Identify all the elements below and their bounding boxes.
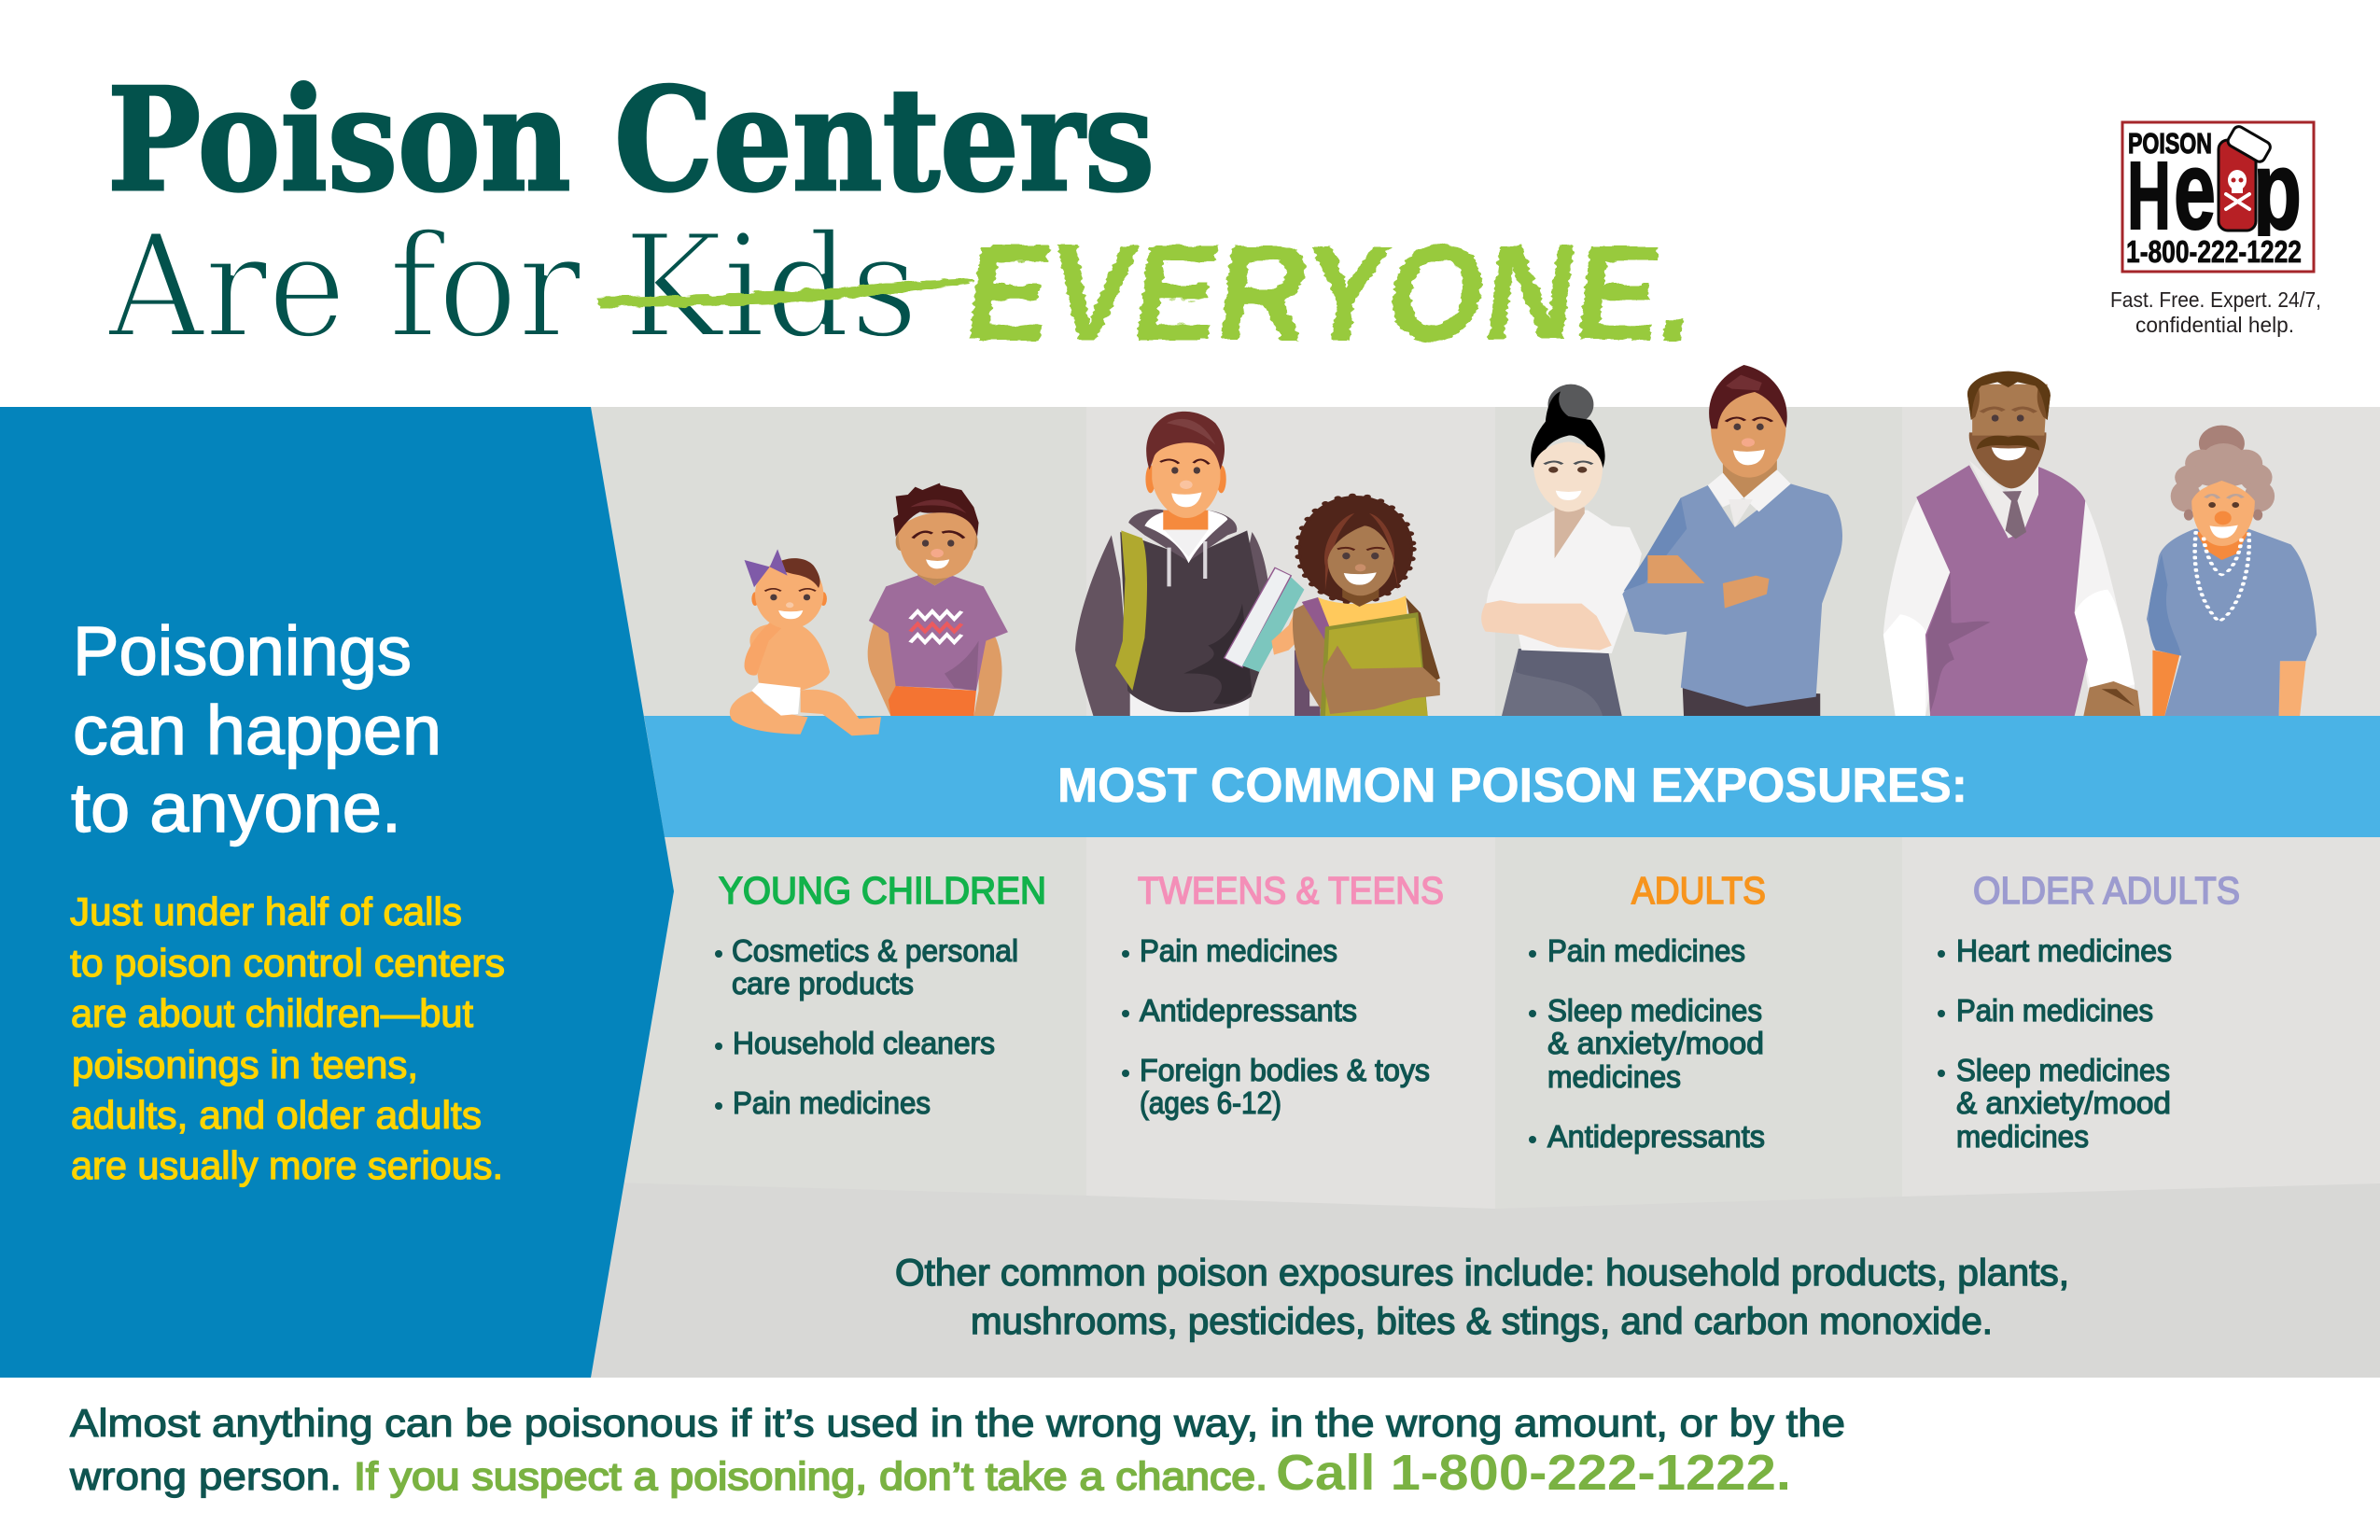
list: tweens and teens: (ages 6-12) [1140, 1085, 1281, 1120]
logo caption [2110, 287, 2321, 337]
panel body text: Just under half of calls [70, 889, 462, 933]
list: adults [1529, 933, 1765, 1154]
logo: Poison Help: e [2174, 128, 2216, 253]
column: older adults [1938, 869, 2240, 1154]
illustration: teen boy [1075, 412, 1304, 716]
list: adults: & anxiety/mood [1547, 1026, 1764, 1060]
text block: other common exposures: mushrooms, pesticides, bites & stings, and carbon monoxide. [971, 1301, 1993, 1342]
list: young children: Pain medicines [733, 1085, 931, 1120]
text block: other common exposures [895, 1253, 2069, 1342]
list: adults: Sleep medicines [1547, 993, 1762, 1028]
panel: blue left panel [0, 407, 674, 1378]
text block: other common exposures: Other common poison exposures include: household products, plants, [895, 1253, 2069, 1294]
footer phone number: Call 1-800-222-1222. [1276, 1445, 1791, 1501]
illustration: adult man [1622, 365, 1842, 716]
list: older adults: & anxiety/mood [1956, 1085, 2171, 1120]
heading: older adults: OLDER ADULTS [1973, 869, 2240, 912]
footer message: Almost anything can be poisonous if it’s used in the wrong way, in the wrong amount, or by the [70, 1401, 1845, 1445]
logo: Poison Help: 1-800-222-1222 [2126, 234, 2302, 269]
illustration: older man [1883, 371, 2140, 716]
panel body text: poisonings in teens, [72, 1043, 418, 1086]
footer message: wrong person. [69, 1454, 342, 1498]
logo: Poison Help: POISON [2128, 127, 2212, 160]
list: older adults: Pain medicines [1956, 993, 2153, 1028]
illustration: baby [730, 549, 881, 735]
panel: gray background columns [579, 407, 2380, 1378]
list: young children: care products [732, 966, 914, 1001]
list: tweens and teens: Antidepressants [1140, 993, 1357, 1028]
list: older adults: Heart medicines [1956, 933, 2172, 968]
panel body text: adults, and older adults [71, 1093, 482, 1137]
logo caption: confidential help. [2135, 313, 2294, 337]
illustration: older woman [2147, 426, 2317, 716]
panel body text: are about children—but [71, 991, 473, 1035]
list: adults: Antidepressants [1547, 1119, 1765, 1154]
panel heading: to anyone. [71, 769, 401, 847]
list: adults: medicines [1547, 1059, 1681, 1094]
illustration: woman [1481, 385, 1642, 716]
heading: tweens and teens: TWEENS & TEENS [1138, 869, 1444, 912]
footer message [69, 1401, 1845, 1501]
logo: Poison Help: p [2253, 128, 2302, 253]
list: tweens and teens: Foreign bodies & toys [1140, 1053, 1430, 1087]
panel heading: Poisonings [73, 612, 412, 690]
list: older adults: medicines [1956, 1119, 2089, 1154]
title [107, 56, 1704, 371]
column: young children [715, 869, 1046, 1120]
logo caption: Fast. Free. Expert. 24/7, [2110, 287, 2321, 312]
heading: young children: YOUNG CHILDREN [719, 869, 1046, 912]
column: adults [1529, 869, 1766, 1154]
logo: Poison Help [2122, 122, 2314, 272]
column: tweens and teens [1122, 869, 1444, 1120]
illustration: boy [868, 483, 1008, 716]
panel body text: to poison control centers [70, 941, 505, 985]
panel heading: can happen [73, 692, 441, 769]
icon: poison bottle with skull [2219, 124, 2273, 231]
bar heading: MOST COMMON POISON EXPOSURES: [1057, 759, 1967, 813]
panel heading [71, 612, 441, 847]
panel body text [70, 889, 505, 1187]
title line 1: Poison Centers [107, 56, 1155, 223]
list: young children: Cosmetics & personal [732, 933, 1018, 968]
green strike through Kids [597, 278, 973, 307]
list: young children: Household cleaners [733, 1026, 995, 1060]
panel body text: are usually more serious. [71, 1143, 503, 1187]
brush word everyone: EVERYONE. [958, 217, 1704, 370]
illustration: teen girl [1293, 496, 1440, 716]
title line 2: Are for Kids [107, 204, 918, 371]
bar: most common poison exposures [644, 716, 2380, 837]
list: tweens and teens: Pain medicines [1140, 933, 1337, 968]
list: older adults [1938, 933, 2172, 1154]
footer call to action: If you suspect a poisoning, don’t take a chance. [354, 1454, 1267, 1498]
list: older adults: Sleep medicines [1956, 1053, 2170, 1087]
logo: Poison Help: H [2127, 142, 2171, 249]
list: tweens and teens [1122, 933, 1430, 1120]
list: adults: Pain medicines [1547, 933, 1745, 968]
list: young children [715, 933, 1018, 1120]
heading: adults: ADULTS [1631, 869, 1766, 912]
